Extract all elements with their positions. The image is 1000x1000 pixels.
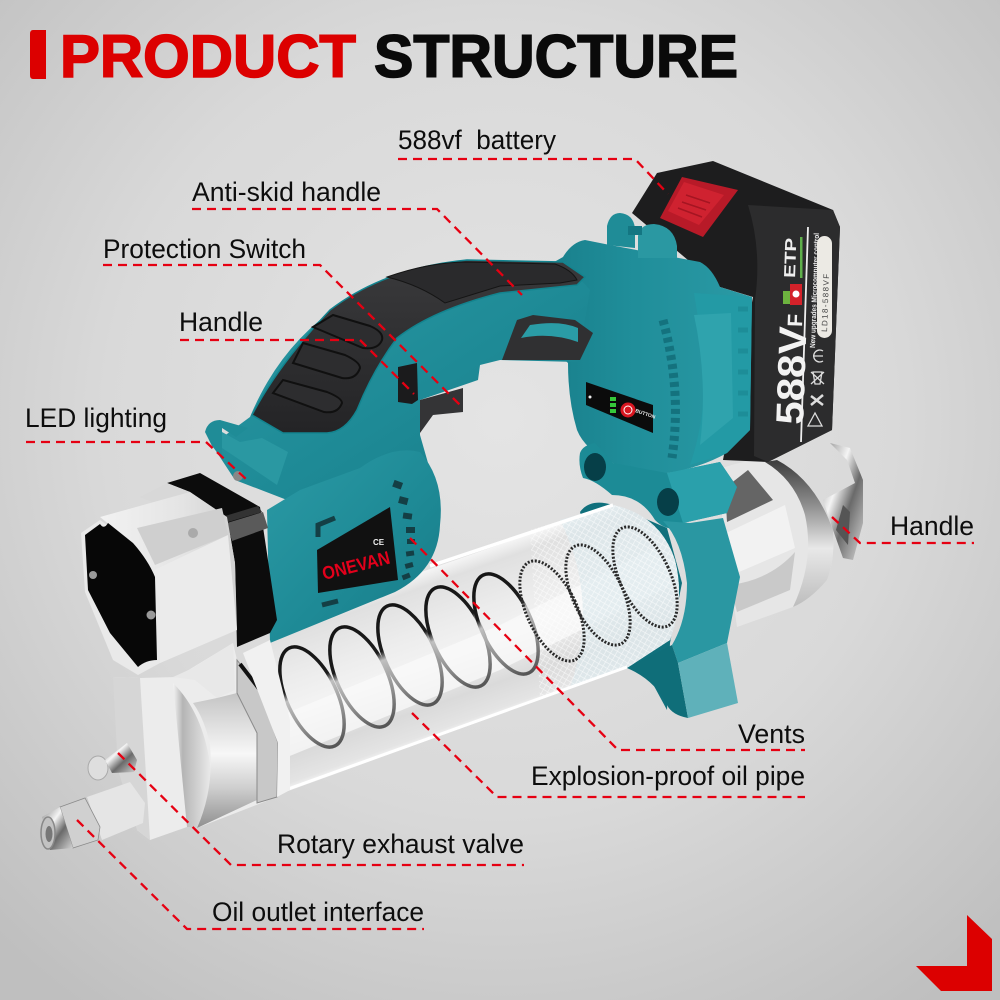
callout: anti-skid handle: Anti-skid handle bbox=[192, 177, 381, 207]
callout: vents bbox=[410, 538, 805, 750]
bracket arm bbox=[173, 643, 235, 698]
battery ETP logo bbox=[782, 237, 802, 278]
CE mark: CE bbox=[373, 538, 385, 547]
handle body bbox=[212, 260, 590, 505]
display button label: BUTTON bbox=[634, 408, 656, 421]
battery model pill bbox=[817, 236, 832, 338]
battery pack bbox=[632, 161, 840, 462]
trigger guard bbox=[420, 388, 463, 433]
pipe collar bbox=[243, 640, 290, 797]
motor black band bbox=[167, 473, 277, 647]
lower rear grip bbox=[502, 315, 593, 360]
battery voltage text: 588V bbox=[769, 326, 815, 425]
callout: vents: Vents bbox=[738, 719, 805, 749]
upper grip pad bbox=[387, 262, 577, 303]
battery model pill: LD18-588VF bbox=[820, 274, 831, 332]
callout: oil outlet interface bbox=[77, 820, 424, 929]
callout: protection switch: Protection Switch bbox=[103, 234, 306, 264]
callout: LED lighting bbox=[25, 403, 246, 479]
battery microcomputer text: New upgrades Microcomputer control bbox=[808, 233, 821, 348]
callout: rotary exhaust valve bbox=[118, 753, 524, 865]
callout: handle right bbox=[832, 511, 974, 543]
callout: anti-skid handle bbox=[192, 177, 522, 295]
front black face bbox=[85, 523, 157, 667]
yoke back shell bbox=[580, 503, 682, 710]
protection switch bbox=[398, 363, 418, 404]
callout: LED lighting: LED lighting bbox=[25, 403, 167, 433]
callout: handle left: Handle bbox=[179, 307, 263, 337]
callout: 588vf battery bbox=[398, 125, 668, 194]
housing slots bbox=[318, 518, 338, 605]
grease gun illustration bbox=[41, 161, 863, 850]
callout: handle left bbox=[179, 307, 414, 394]
tube mounting clamp bbox=[627, 518, 740, 718]
vents bbox=[392, 480, 415, 580]
corner mark bbox=[916, 915, 992, 991]
title bbox=[30, 23, 738, 90]
LED lamp mount bbox=[205, 420, 288, 485]
main anti-skid grip bbox=[252, 260, 585, 433]
oil outlet interface bbox=[41, 782, 145, 850]
callout: explosion-proof oil pipe: Explosion-proof oil pipe bbox=[531, 761, 805, 791]
transparent oil pipe bbox=[270, 505, 679, 795]
battery white rule bbox=[801, 227, 808, 442]
spring coil bbox=[267, 517, 690, 757]
title accent bar bbox=[30, 30, 46, 79]
grip ribs bbox=[273, 315, 382, 412]
callout: oil outlet interface: Oil outlet interface bbox=[212, 897, 424, 927]
callout: protection switch bbox=[103, 234, 460, 405]
battery certification marks bbox=[808, 350, 824, 426]
callout: 588vf battery: 588vf battery bbox=[398, 125, 556, 155]
title word: PRODUCT: PRODUCT bbox=[60, 23, 356, 90]
callout: rotary exhaust valve: Rotary exhaust valve bbox=[277, 829, 524, 859]
battery voltage suffix: F bbox=[784, 313, 807, 327]
rear head side panel bbox=[663, 293, 752, 465]
rear tube end cap and lever bbox=[722, 443, 863, 627]
battery side face bbox=[748, 205, 840, 462]
brand text: ONEVAN bbox=[320, 547, 392, 584]
battery mounting lugs bbox=[607, 213, 677, 258]
rear head housing bbox=[500, 240, 752, 473]
battery badge bbox=[783, 284, 802, 305]
grip window bbox=[521, 323, 578, 342]
rotary exhaust valve bbox=[88, 743, 137, 780]
brand badge bbox=[317, 507, 398, 593]
front rim bbox=[81, 520, 160, 675]
yoke upper mounts bbox=[579, 443, 737, 528]
pump cylinder body bbox=[193, 693, 257, 828]
callout: handle right: Handle bbox=[890, 511, 974, 541]
lower casting bbox=[113, 640, 290, 840]
title word: STRUCTURE: STRUCTURE bbox=[374, 23, 738, 90]
battery ETP logo: ETP bbox=[782, 237, 800, 278]
motor housing bbox=[267, 450, 441, 643]
pump cylinder dome bbox=[173, 683, 212, 828]
battery release latch bbox=[660, 177, 738, 237]
callout: explosion-proof oil pipe bbox=[412, 713, 805, 797]
threaded ring bbox=[237, 660, 278, 803]
display panel bbox=[586, 382, 656, 433]
front silver block bbox=[81, 483, 237, 675]
